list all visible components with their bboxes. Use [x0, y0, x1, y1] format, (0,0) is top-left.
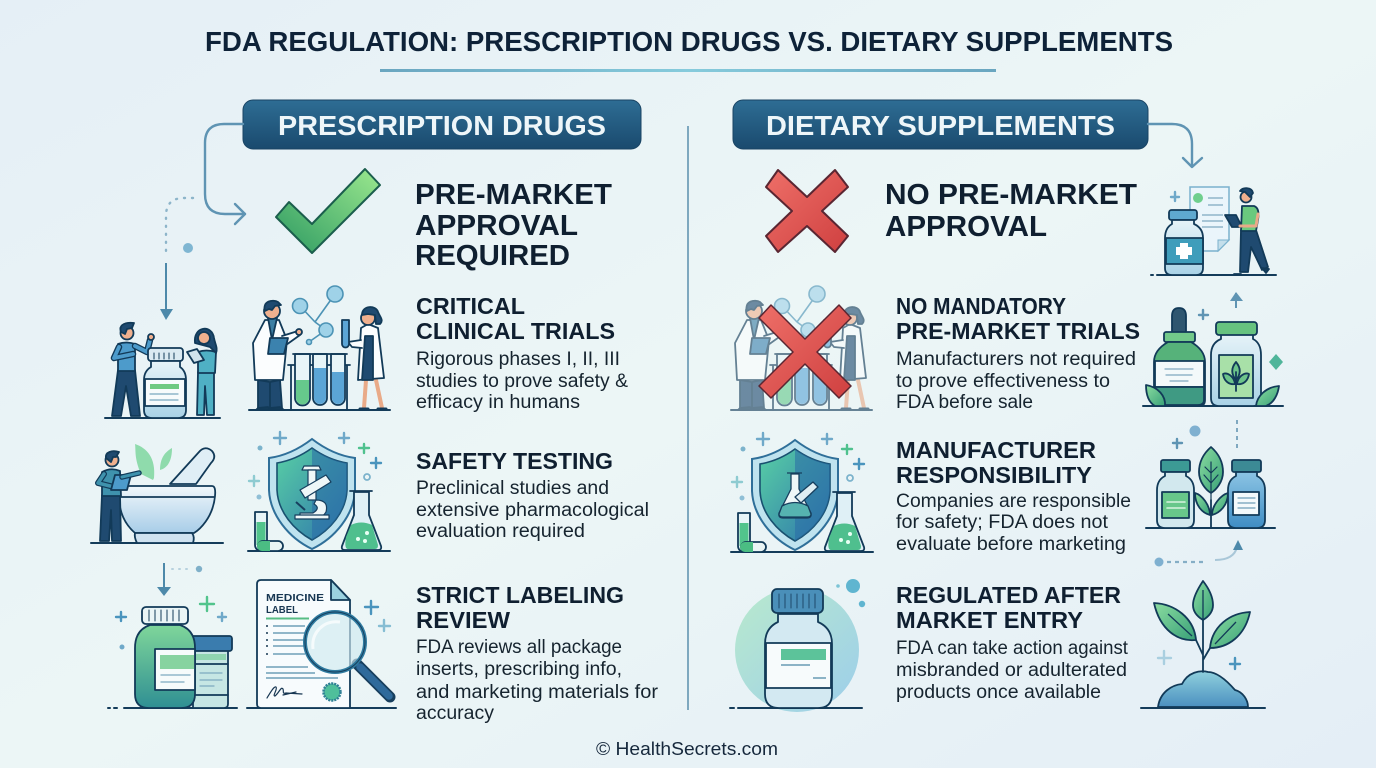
heading and text: manufacturer responsibility — [896, 437, 1131, 555]
icon: shield with flask — [731, 433, 873, 552]
heading: pre-market approval required: PRE-MARKET — [415, 179, 612, 211]
heading and text: strict labeling review — [416, 582, 659, 724]
heading and text: critical clinical trials: studies to prove safety & — [416, 371, 628, 392]
heading and text: safety testing: evaluation required — [416, 521, 585, 542]
heading and text: strict labeling review: REVIEW — [416, 607, 511, 633]
heading and text: manufacturer responsibility: Companies are responsible — [896, 491, 1131, 512]
arrow: header to check mark — [205, 124, 245, 224]
heading and text: critical clinical trials — [416, 293, 628, 413]
heading and text: no mandatory trials: PRE-MARKET TRIALS — [896, 318, 1140, 344]
arrow: down with dots — [157, 563, 202, 596]
icon: medicine label document with magnifier: MEDICINE — [266, 592, 324, 604]
heading and text: safety testing: extensive pharmacological — [416, 500, 649, 521]
icon: scientists crossed out — [731, 286, 872, 410]
dotted connector and arrow down — [160, 198, 193, 320]
heading and text: regulated after market entry — [896, 582, 1129, 703]
heading and text: critical clinical trials: Rigorous phases I, II, III — [416, 349, 620, 370]
icon: medicine label document with magnifier: LABEL — [266, 604, 299, 616]
heading and text: safety testing — [416, 448, 649, 542]
heading and text: safety testing: Preclinical studies and — [416, 478, 609, 499]
title: FDA REGULATION: PRESCRIPTION DRUGS VS. DIETARY SUPPLEMENTS — [205, 26, 1173, 57]
icon: medicine bottles — [108, 597, 237, 708]
heading and text: strict labeling review: accuracy — [416, 703, 495, 724]
heading and text: no mandatory trials — [896, 293, 1140, 413]
heading: pre-market approval required — [415, 179, 612, 272]
heading and text: no mandatory trials: Manufacturers not required — [896, 349, 1136, 370]
heading: no pre-market approval — [885, 179, 1137, 243]
arrow: header to supplements — [1148, 124, 1202, 167]
icon: seedling on mound — [1141, 581, 1265, 708]
icon: red X — [766, 170, 848, 252]
heading and text: strict labeling review: inserts, prescribing info, — [416, 659, 622, 680]
heading and text: regulated after market entry: misbranded or adulterated — [896, 660, 1127, 681]
heading: prescription drugs — [243, 100, 641, 149]
icon: dropper bottle and herbal jar — [1143, 308, 1283, 406]
icon: medicine label document with magnifier — [247, 580, 396, 708]
heading and text: manufacturer responsibility: RESPONSIBILITY — [896, 462, 1092, 488]
heading and text: strict labeling review: STRICT LABELING — [416, 582, 624, 608]
heading and text: no mandatory trials: to prove effectiveness to — [896, 371, 1110, 392]
heading and text: no mandatory trials: FDA before sale — [896, 392, 1033, 413]
heading and text: strict labeling review: FDA reviews all package — [416, 637, 622, 658]
icon: bottle in green-blue circle — [730, 579, 865, 712]
icon: people with medicine bottle — [105, 323, 220, 418]
footer: © HealthSecrets.com — [596, 739, 778, 759]
heading and text: strict labeling review: and marketing materials for — [416, 682, 659, 703]
heading and text: critical clinical trials: CLINICAL TRIALS — [416, 318, 615, 344]
heading: dietary supplements: DIETARY SUPPLEMENTS — [766, 110, 1115, 141]
heading and text: manufacturer responsibility: MANUFACTURER — [896, 437, 1096, 463]
heading: no pre-market approval: APPROVAL — [885, 211, 1047, 243]
icon: green check mark — [276, 169, 380, 253]
icon: scientists with test tubes — [249, 286, 390, 410]
column divider — [687, 126, 689, 710]
icon: shield with microscope — [248, 432, 390, 551]
icon: person with supplement bottle and document — [1151, 187, 1276, 275]
heading: dietary supplements — [733, 100, 1148, 149]
heading and text: regulated after market entry: MARKET ENTRY — [896, 607, 1083, 633]
icon: man with mortar and pestle — [91, 444, 223, 543]
arrow: dashed to up-right — [1154, 540, 1243, 566]
heading and text: regulated after market entry: FDA can take action against — [896, 638, 1129, 659]
heading: prescription drugs: PRESCRIPTION DRUGS — [278, 110, 606, 141]
heading and text: safety testing: SAFETY TESTING — [416, 448, 613, 474]
icon: supplement bottles with leaf — [1146, 420, 1275, 528]
heading: pre-market approval required: APPROVAL — [415, 210, 578, 242]
heading: no pre-market approval: NO PRE-MARKET — [885, 179, 1137, 211]
heading and text: no mandatory trials: NO MANDATORY — [896, 293, 1066, 319]
heading and text: critical clinical trials: efficacy in humans — [416, 392, 580, 413]
heading and text: regulated after market entry: products once available — [896, 682, 1101, 703]
heading and text: critical clinical trials: CRITICAL — [416, 293, 525, 319]
heading and text: regulated after market entry: REGULATED AFTER — [896, 582, 1121, 608]
heading and text: manufacturer responsibility: evaluate before marketing — [896, 534, 1126, 555]
heading: pre-market approval required: REQUIRED — [415, 240, 570, 272]
arrow: up — [1230, 292, 1243, 308]
heading and text: manufacturer responsibility: for safety; FDA does not — [896, 512, 1109, 533]
